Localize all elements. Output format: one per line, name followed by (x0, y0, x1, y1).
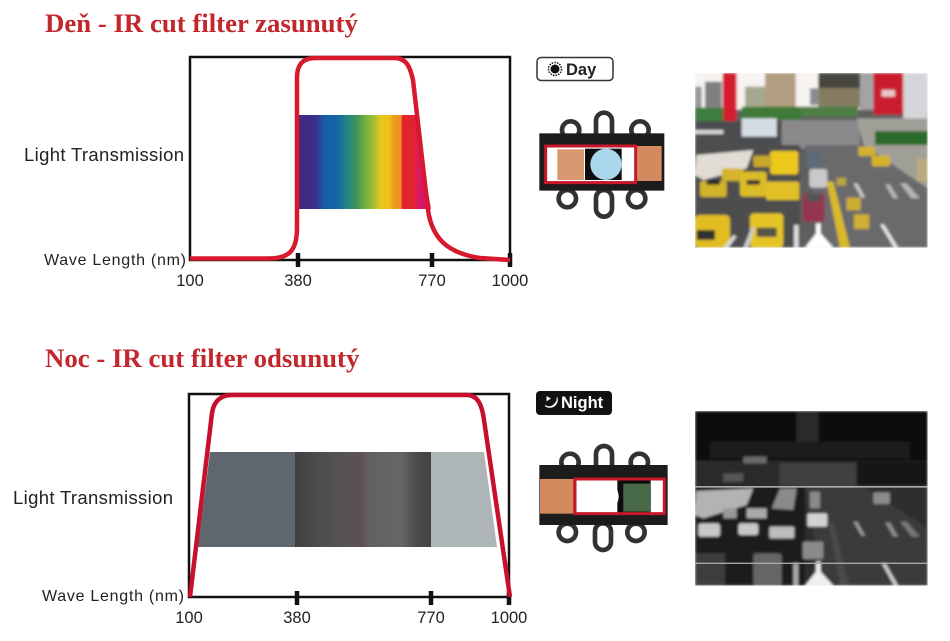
tick labels: 100 (176, 272, 204, 290)
transmission curve (190, 395, 510, 597)
tick labels (176, 272, 528, 290)
visible spectrum in grey (295, 452, 431, 547)
tick labels (175, 609, 527, 627)
tick labels: 380 (284, 272, 312, 290)
heading: day: Deň - IR cut filter zasunutý (45, 8, 358, 38)
axis label: light transmission: Light Transmission (13, 487, 173, 508)
transmission curve (190, 58, 510, 260)
heading: night: Noc - IR cut filter odsunutý (45, 343, 360, 373)
badge: day: Day (566, 61, 597, 79)
tick labels: 1000 (492, 272, 528, 290)
icon: moon (545, 397, 557, 407)
photo: daytime street (695, 73, 928, 248)
chart frame (190, 57, 510, 267)
filter module: day (539, 113, 664, 217)
rainbow spectrum band (299, 115, 431, 209)
tick labels: 770 (417, 609, 445, 627)
badge: night: Night (561, 394, 604, 412)
chart: night light transmission (13, 394, 527, 627)
photo: night street (695, 411, 928, 586)
cars (770, 151, 798, 174)
tick labels: 100 (175, 609, 203, 627)
badge: day (537, 58, 613, 80)
axis label: wave length: Wave Length (nm) (42, 588, 184, 605)
axis label: light transmission: Light Transmission (24, 144, 184, 165)
icon: sun (548, 62, 562, 76)
chart frame (189, 394, 509, 605)
chart: day light transmission (24, 57, 528, 290)
tick labels: 1000 (491, 609, 527, 627)
axis label: wave length: Wave Length (nm) (44, 252, 186, 269)
filter module: night (539, 446, 668, 550)
infrared and ultraviolet grey bands (198, 452, 497, 547)
tick labels: 770 (418, 272, 446, 290)
tick labels: 380 (283, 609, 311, 627)
badge: night (536, 391, 612, 415)
